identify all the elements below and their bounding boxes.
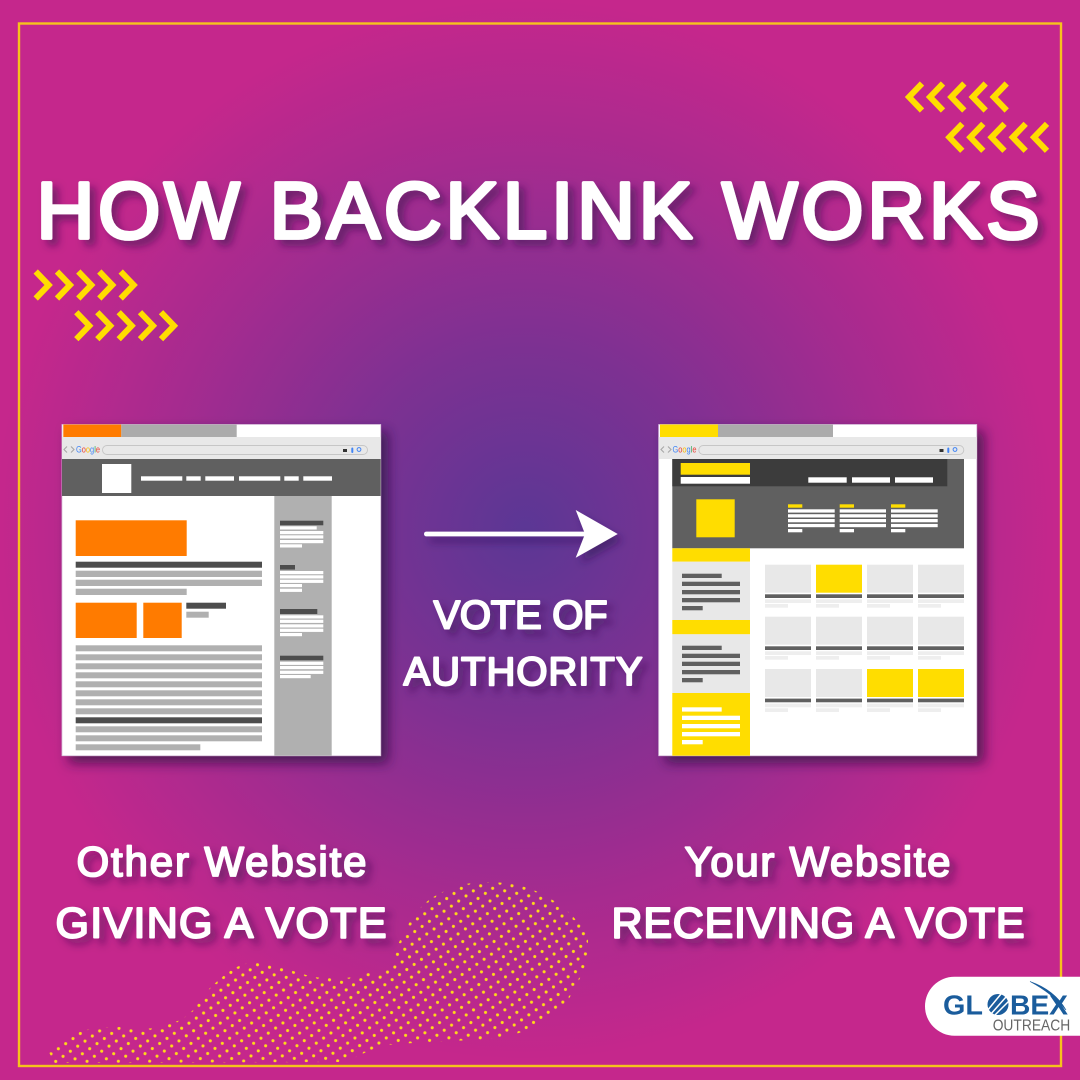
dotted blob decoration bbox=[49, 882, 588, 1063]
site hero header bbox=[672, 459, 964, 548]
vote of authority label bbox=[404, 594, 642, 694]
logo: globex outreach: GL bbox=[943, 990, 983, 1020]
caption: other website: Other Website bbox=[76, 838, 366, 885]
browser tabs bbox=[660, 424, 833, 437]
browser toolbar bbox=[659, 437, 977, 459]
logo: globex outreach: BEX bbox=[1010, 990, 1068, 1020]
caption: your website bbox=[612, 838, 1024, 947]
vote of authority label: AUTHORITY bbox=[404, 650, 642, 694]
sidebar bbox=[274, 496, 332, 756]
browser toolbar: Google bbox=[672, 444, 696, 456]
caption: other website: GIVING A VOTE bbox=[56, 899, 386, 947]
browser window frame bbox=[659, 424, 977, 756]
vote of authority label: VOTE OF bbox=[434, 594, 608, 638]
browser toolbar bbox=[62, 437, 381, 459]
arrow bbox=[424, 510, 618, 558]
caption: your website: Your Website bbox=[684, 838, 950, 885]
site header bbox=[62, 459, 381, 496]
browser tabs bbox=[63, 424, 237, 437]
chevrons top right bbox=[909, 84, 1047, 151]
product grid bbox=[765, 565, 964, 712]
browser: your website bbox=[659, 424, 977, 756]
caption: other website bbox=[56, 838, 386, 947]
left column bbox=[672, 548, 750, 756]
logo: globex outreach bbox=[925, 977, 1080, 1036]
chevrons left bbox=[36, 272, 174, 339]
title: HOW BACKLINK WORKS bbox=[36, 166, 1040, 255]
article content bbox=[76, 520, 262, 750]
browser: other website bbox=[62, 424, 381, 756]
caption: your website: RECEIVING A VOTE bbox=[612, 899, 1024, 947]
logo: globex outreach: OUTREACH bbox=[993, 1018, 1070, 1035]
browser toolbar: Google bbox=[76, 444, 100, 456]
browser window frame bbox=[62, 424, 381, 756]
